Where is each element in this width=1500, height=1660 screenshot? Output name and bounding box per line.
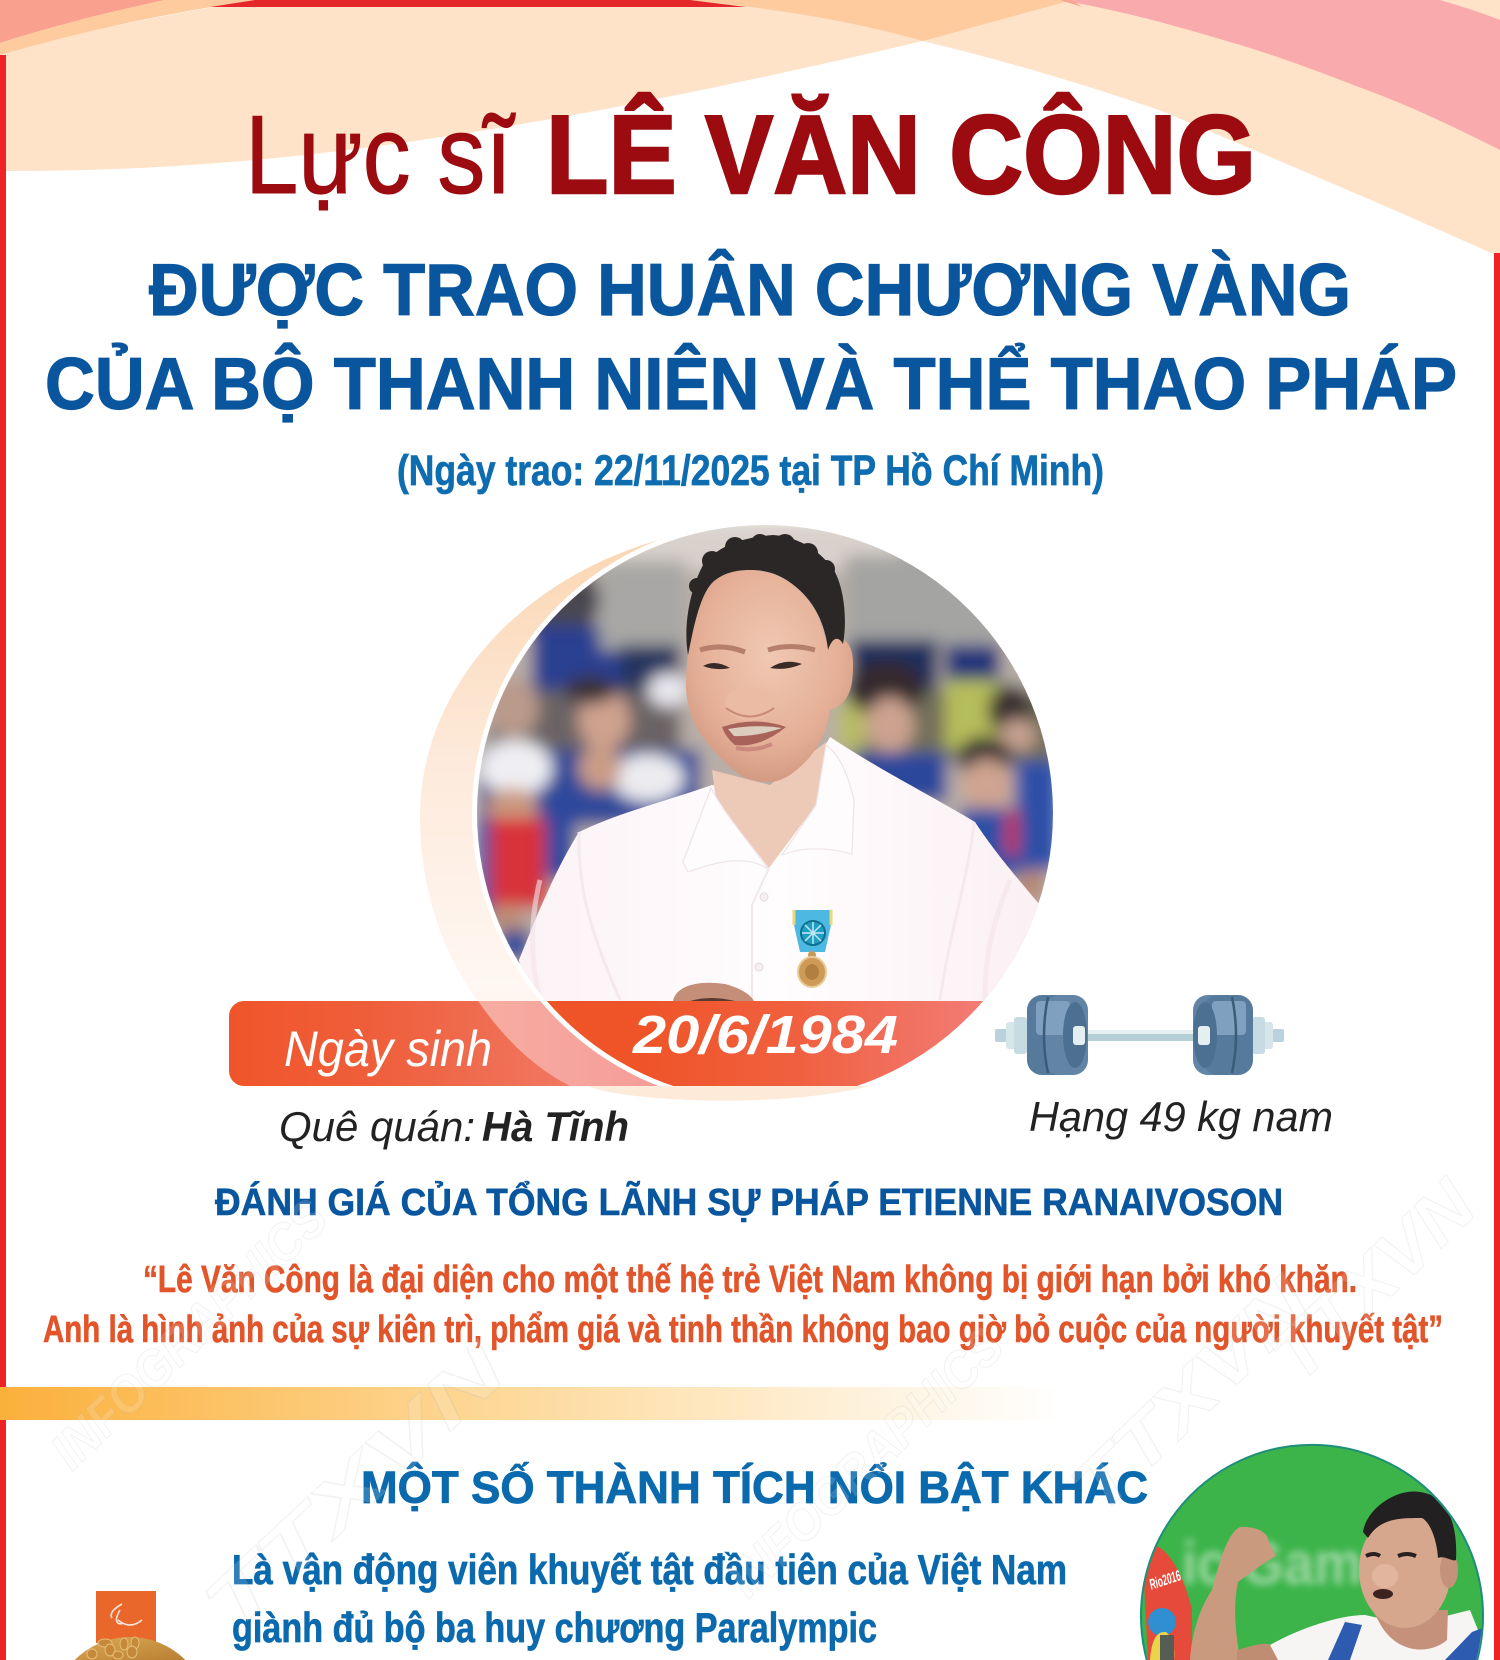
hometown xyxy=(279,1103,629,1150)
achievement line 2: giành đủ bộ ba huy chương Paralympic xyxy=(232,1604,877,1651)
athlete eyes nose mouth xyxy=(1366,1554,1416,1556)
title: athlete name: LÊ VĂN CÔNG xyxy=(546,93,1256,217)
watermark: TTXVN right: TTXVN xyxy=(1056,1261,1329,1529)
birth date value: 20/6/1984 xyxy=(632,1005,898,1065)
man: nose xyxy=(726,704,740,718)
man: mouth xyxy=(722,722,786,745)
athlete arm and fist xyxy=(1190,1527,1276,1660)
man: shirt folds and placket xyxy=(752,868,769,1001)
blurred arena lettering: ic Gam xyxy=(1182,1530,1362,1597)
portrait photo xyxy=(477,525,1053,1001)
man: collar xyxy=(683,745,854,872)
watermark: INFOGRAPHICS centre: INFOGRAPHICS xyxy=(716,1317,1016,1609)
board logo: Rio2016 xyxy=(1147,1567,1183,1594)
hometown value: Hà Tĩnh xyxy=(482,1103,629,1150)
medal on shirt xyxy=(794,910,831,987)
man: face xyxy=(686,570,853,782)
man: hand xyxy=(673,983,754,1001)
athlete photo xyxy=(1141,1445,1490,1660)
icon: barbell xyxy=(995,995,1284,1075)
man: eyes and brows xyxy=(700,646,815,652)
subtitle xyxy=(45,250,1457,425)
quote heading: ĐÁNH GIÁ CỦA TỔNG LÃNH SỰ PHÁP ETIENNE RANAIVOSON xyxy=(215,1179,1283,1224)
birth date banner right xyxy=(546,1001,984,1086)
medal bumps xyxy=(87,1637,139,1659)
hometown label: Quê quán: xyxy=(279,1103,475,1150)
barbell bar xyxy=(1083,1030,1200,1041)
medal agitos logo xyxy=(111,1604,142,1625)
quote xyxy=(43,1259,1443,1351)
subtitle line 1: ĐƯỢC TRAO HUÂN CHƯƠNG VÀNG xyxy=(149,250,1351,331)
icon: paralympic gold medal xyxy=(75,1591,185,1660)
left border stripe xyxy=(0,55,6,1660)
barbell right plates xyxy=(1193,995,1236,1075)
barbell collars xyxy=(1073,1026,1085,1045)
medal disc xyxy=(75,1637,185,1660)
top wave decoration xyxy=(0,0,1500,257)
man: white shirt xyxy=(519,534,1040,1001)
watermark: INFOGRAPHICS left: INFOGRAPHICS xyxy=(40,1189,340,1481)
weight class: Hạng 49 kg nam xyxy=(1029,1093,1333,1140)
barbell end bolts xyxy=(995,1029,1007,1042)
man: hair xyxy=(686,534,845,655)
right border stripe xyxy=(1494,253,1500,1660)
title xyxy=(245,93,1256,217)
white ring around portrait xyxy=(472,537,874,1086)
award date: (Ngày trao: 22/11/2025 tại TP Hồ Chí Minh) xyxy=(397,447,1104,495)
watermark: TTXVN left: TTXVN xyxy=(188,1327,523,1647)
achievements heading: MỘT SỐ THÀNH TÍCH NỔI BẬT KHÁC xyxy=(361,1462,1148,1513)
athlete ear xyxy=(1440,1558,1458,1588)
athlete face xyxy=(1359,1512,1451,1628)
gradient divider bar xyxy=(0,1387,1060,1420)
athlete white vest xyxy=(1270,1610,1490,1660)
red board xyxy=(1142,1543,1192,1660)
athlete straps xyxy=(1328,1622,1490,1660)
man: shirt buttons xyxy=(760,893,768,901)
achievement text xyxy=(232,1546,1067,1651)
barbell left plates xyxy=(1027,995,1077,1075)
athlete neck xyxy=(1372,1610,1448,1650)
birth date banner left xyxy=(229,1001,699,1086)
subtitle line 2: CỦA BỘ THANH NIÊN VÀ THỂ THAO PHÁP xyxy=(45,344,1457,425)
birth date label: Ngày sinh xyxy=(284,1021,492,1077)
peach crescent behind portrait xyxy=(420,537,1000,1101)
title: regular part: Lực sĩ xyxy=(245,93,516,217)
achievement line 1: Là vận động viên khuyết tật đầu tiên của Việt Nam xyxy=(232,1546,1067,1593)
athlete hair xyxy=(1363,1492,1456,1560)
man: neck xyxy=(712,742,826,868)
medal ribbon xyxy=(96,1591,156,1643)
watermark: TTXVN far right: TTXVN xyxy=(1256,1164,1492,1397)
photo background crowd xyxy=(477,525,1053,1001)
